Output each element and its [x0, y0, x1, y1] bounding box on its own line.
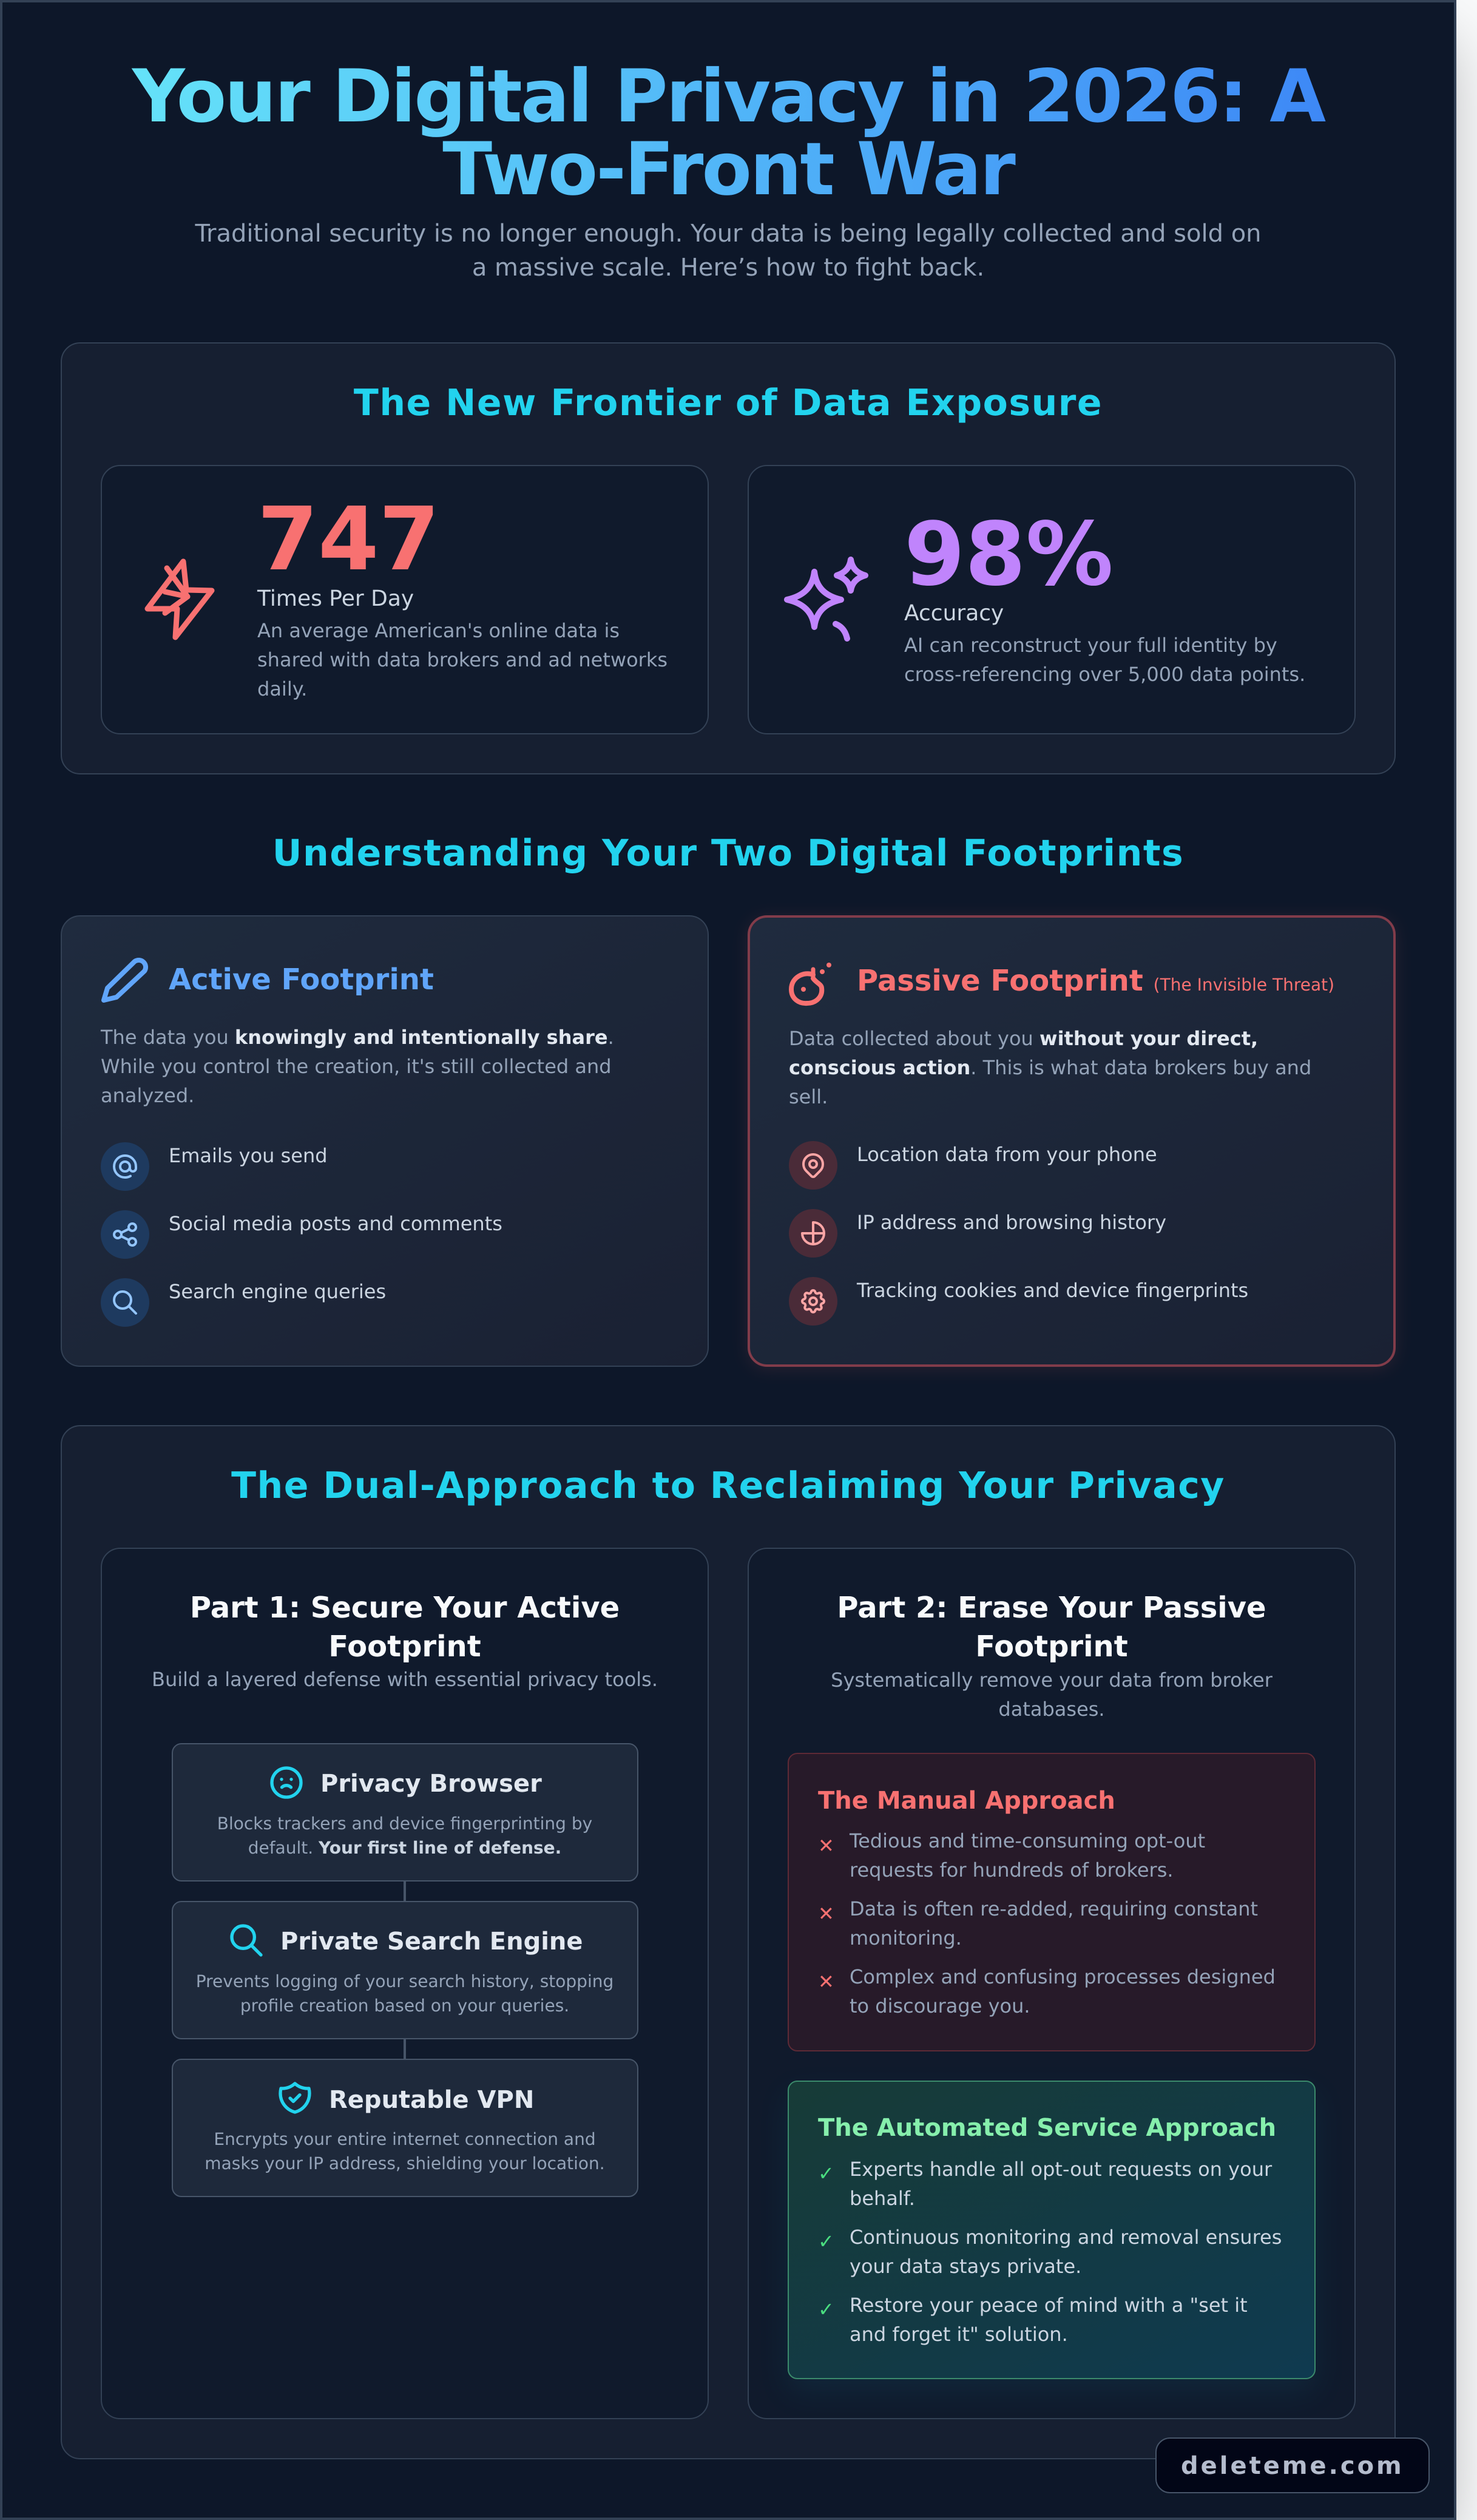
callout: automated service approach: ✓	[818, 2162, 834, 2185]
icon: shield check	[280, 2084, 309, 2112]
active heading: Active Footprint	[169, 963, 434, 997]
icon: lightning bolt	[147, 561, 212, 637]
icon: search	[114, 1292, 136, 1313]
subtitle: Traditional security is no longer enough. Your data is being legally collected and sold on	[194, 220, 1262, 248]
passive description: without your direct,	[1039, 1027, 1258, 1050]
passive heading: Passive Footprint (The Invisible Threat)	[857, 964, 1334, 998]
passive description: conscious action	[789, 1056, 970, 1079]
icon: at symbol	[114, 1156, 136, 1177]
tool card: private search engine	[172, 1902, 638, 2039]
part 1 heading: Footprint	[328, 1630, 481, 1664]
stat label: Accuracy	[904, 601, 1004, 626]
tool card: reputable vpn: Reputable VPN	[329, 2086, 534, 2114]
callout: automated service approach: and forget it" solution.	[850, 2323, 1068, 2346]
heading: dual approach: The Dual-Approach to Reclaiming Your Privacy	[231, 1465, 1225, 1507]
part 1 heading: Part 1: Secure Your Active	[190, 1591, 620, 1625]
stat description: daily.	[257, 677, 307, 700]
heading: two digital footprints: Understanding Your Two Digital Footprints	[272, 832, 1184, 875]
stat description: cross-referencing over 5,000 data points.	[904, 663, 1305, 686]
callout: manual approach: Complex and confusing processes designed	[850, 1965, 1276, 1988]
list item: search queries	[101, 1278, 386, 1327]
callout: manual approach: Tedious and time-consuming opt-out	[849, 1829, 1205, 1852]
icon: pencil	[104, 960, 146, 1000]
list item: search queries: Search engine queries	[169, 1280, 386, 1303]
callout: manual approach	[788, 1753, 1315, 2051]
connector lines	[404, 1882, 406, 2059]
callout: automated service approach: Continuous monitoring and removal ensures	[850, 2226, 1282, 2249]
tool card: privacy browser: Blocks trackers and device fingerprinting by	[217, 1814, 592, 1834]
icon: magnifier	[232, 1926, 261, 1955]
icon: globe quadrant	[802, 1222, 824, 1244]
callout: automated service approach	[788, 2081, 1315, 2391]
tool card: reputable vpn: masks your IP address, shielding your location.	[204, 2153, 605, 2173]
list item: social media: Social media posts and comments	[169, 1212, 502, 1235]
stat card: 747	[101, 466, 708, 734]
icon: sparkles	[787, 560, 865, 638]
list item: emails: Emails you send	[169, 1144, 328, 1167]
stat number: 747	[257, 488, 440, 590]
panel: part 1	[101, 1548, 708, 2419]
callout: automated service approach: ✓	[818, 2230, 834, 2253]
callout: automated service approach: The Automated Service Approach	[818, 2114, 1276, 2142]
title: Your Digital Privacy in 2026: A	[131, 55, 1326, 139]
list item: tracking cookies	[789, 1277, 1248, 1326]
part 1 subheading: Build a layered defense with essential privacy tools.	[152, 1668, 658, 1691]
callout: manual approach: monitoring.	[850, 1926, 962, 1949]
callout: manual approach: ✕	[818, 1970, 834, 1993]
stat description: shared with data brokers and ad networks	[257, 648, 668, 671]
list item: location	[789, 1141, 1157, 1190]
tool card: private search engine: Prevents logging of your search history, stopping	[196, 1971, 613, 1991]
callout: manual approach: The Manual Approach	[818, 1787, 1115, 1815]
callout: manual approach: ✕	[818, 1902, 834, 1925]
callout: manual approach: Data is often re-added, requiring constant	[850, 1897, 1258, 1920]
tool card: reputable vpn: Encrypts your entire internet connection and	[214, 2129, 596, 2149]
list item: ip address: IP address and browsing history	[857, 1211, 1166, 1234]
tool card: private search engine: Private Search Engine	[280, 1928, 583, 1956]
callout: manual approach: ✕	[818, 1834, 834, 1857]
part 2 subheading: databases.	[998, 1698, 1105, 1721]
panel: passive footprint	[749, 916, 1394, 1368]
passive description: sell.	[789, 1085, 828, 1108]
footer badge: deleteme.com	[1156, 2438, 1429, 2493]
stat description: An average American's online data is	[257, 619, 620, 642]
heading: new frontier: The New Frontier of Data Exposure	[354, 382, 1103, 424]
active description: knowingly and intentionally share.	[235, 1026, 614, 1049]
passive description: Data collected about you	[789, 1027, 1039, 1050]
list item: emails	[101, 1142, 328, 1191]
callout: automated service approach: Restore your peace of mind with a "set it	[850, 2294, 1248, 2317]
panel: part 2	[748, 1548, 1355, 2419]
title: Two-Front War	[442, 127, 1016, 212]
callout: manual approach: to discourage you.	[850, 1994, 1030, 2017]
header	[131, 55, 1326, 282]
stat description: AI can reconstruct your full identity by	[904, 634, 1277, 657]
tool card: reputable vpn	[172, 2059, 638, 2197]
panel: active footprint	[61, 916, 708, 1366]
icon: bomb	[791, 963, 831, 1003]
stat label: Times Per Day	[257, 586, 414, 611]
active description: The data you	[100, 1026, 235, 1049]
part 2 heading: Footprint	[975, 1630, 1128, 1664]
tool card: privacy browser: Privacy Browser	[320, 1770, 542, 1798]
icon: sad face	[272, 1768, 301, 1797]
callout: automated service approach: behalf.	[850, 2187, 915, 2210]
list item: ip address	[789, 1209, 1166, 1258]
part 2 subheading: Systematically remove your data from broker	[831, 1668, 1273, 1692]
list item: social media	[101, 1210, 502, 1259]
icon: map pin	[803, 1154, 823, 1177]
callout: manual approach: requests for hundreds of brokers.	[850, 1858, 1174, 1882]
list item: tracking cookies: Tracking cookies and device fingerprints	[856, 1279, 1248, 1302]
tool card: privacy browser: default.	[248, 1838, 319, 1858]
footer badge: deleteme.com: deleteme.com	[1181, 2452, 1404, 2480]
part 2 heading: Part 2: Erase Your Passive	[837, 1591, 1266, 1625]
icon: gear	[802, 1290, 824, 1312]
icon: share	[114, 1224, 136, 1245]
stat card: 98%	[748, 466, 1355, 734]
panel: dual approach	[61, 1426, 1395, 2459]
subtitle: a massive scale. Here’s how to fight back.	[472, 254, 984, 282]
tool card: privacy browser: Your first line of defense.	[318, 1838, 561, 1858]
callout: automated service approach: your data stays private.	[850, 2255, 1081, 2278]
callout: automated service approach: Experts handle all opt-out requests on your	[850, 2158, 1273, 2181]
list item: location: Location data from your phone	[857, 1143, 1157, 1166]
active description: While you control the creation, it's still collected and	[101, 1055, 612, 1078]
tool card: private search engine: profile creation based on your queries.	[240, 1996, 569, 2016]
passive description: . This is what data brokers buy and	[970, 1056, 1311, 1079]
tool card: privacy browser	[172, 1744, 638, 1881]
stat number: 98%	[904, 503, 1114, 605]
panel: new frontier of data exposure	[61, 343, 1395, 774]
active description: analyzed.	[101, 1084, 194, 1107]
callout: automated service approach: ✓	[818, 2298, 834, 2321]
